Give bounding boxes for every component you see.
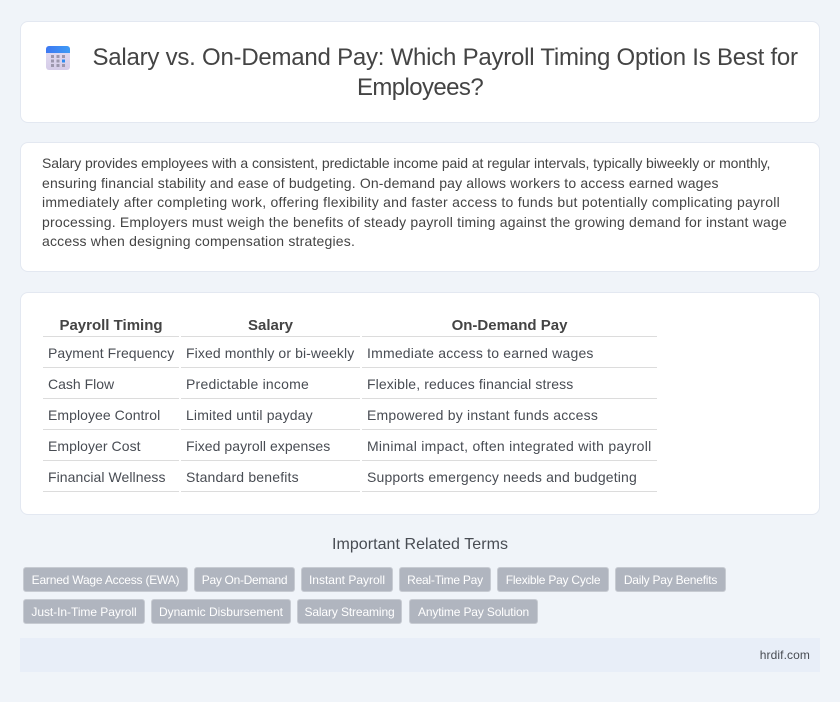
text block: introduction: access when designing compensation strategies. bbox=[42, 233, 355, 249]
related term tags: Real-Time Pay bbox=[407, 573, 483, 587]
title: Salary vs. On-Demand Pay: Which Payroll Timing Option Is Best for bbox=[92, 44, 798, 71]
panel: intro text card bbox=[20, 142, 820, 272]
panel: comparison table card bbox=[20, 292, 820, 515]
related term tags: Anytime Pay Solution bbox=[418, 605, 529, 619]
title: Employees? bbox=[357, 74, 483, 101]
related term tags: Salary Streaming bbox=[304, 605, 395, 619]
title bbox=[92, 44, 798, 101]
related term tags: Daily Pay Benefits bbox=[624, 573, 717, 587]
comparison table: Employer Cost bbox=[48, 438, 141, 454]
comparison table: On-Demand Pay bbox=[452, 317, 567, 334]
comparison table: Predictable income bbox=[186, 376, 309, 392]
comparison table: Immediate access to earned wages bbox=[367, 345, 594, 361]
text block: introduction: ensuring financial stability and ease of budgeting. On-demand pay allows workers to access earned wages bbox=[42, 174, 719, 190]
related term tags: Flexible Pay Cycle bbox=[506, 573, 600, 587]
panel: title card bbox=[20, 21, 820, 123]
icon: calendar bbox=[46, 46, 70, 70]
text block: introduction: Salary provides employees with a consistent, predictable income paid at regular intervals, typically biweekly or monthly, bbox=[42, 155, 770, 171]
text block: introduction: processing. Employers must weigh the benefits of steady payroll timing against the growing demand for instant wage bbox=[42, 214, 787, 230]
comparison table: Limited until payday bbox=[186, 407, 313, 423]
comparison table: Employee Control bbox=[48, 407, 160, 423]
related term tags: Just-In-Time Payroll bbox=[31, 605, 137, 619]
related term tags: Instant Payroll bbox=[309, 573, 385, 587]
comparison table: Payment Frequency bbox=[48, 345, 174, 361]
related term tags: Pay On-Demand bbox=[202, 573, 287, 587]
comparison table: Standard benefits bbox=[186, 469, 299, 485]
heading: related terms: Important Related Terms bbox=[332, 536, 508, 553]
comparison table: Minimal impact, often integrated with payroll bbox=[367, 438, 652, 454]
comparison table: Flexible, reduces financial stress bbox=[367, 376, 573, 392]
footer bbox=[20, 638, 820, 672]
comparison table: Empowered by instant funds access bbox=[367, 407, 598, 423]
text block: introduction bbox=[42, 155, 787, 249]
comparison table: Financial Wellness bbox=[48, 469, 166, 485]
related term tags: Dynamic Disbursement bbox=[159, 605, 283, 619]
footer source text: hrdif.com bbox=[760, 648, 810, 662]
related term tags: Earned Wage Access (EWA) bbox=[32, 573, 179, 587]
comparison table: Fixed monthly or bi-weekly bbox=[186, 345, 354, 361]
comparison table: Cash Flow bbox=[48, 376, 114, 392]
comparison table: Payroll Timing bbox=[59, 317, 163, 334]
comparison table: Fixed payroll expenses bbox=[186, 438, 330, 454]
text block: introduction: immediately after completing work, offering flexibility and faster access to funds but potentially complicating payroll bbox=[42, 194, 780, 210]
comparison table: Supports emergency needs and budgeting bbox=[367, 469, 637, 485]
comparison table: Salary bbox=[248, 317, 293, 334]
